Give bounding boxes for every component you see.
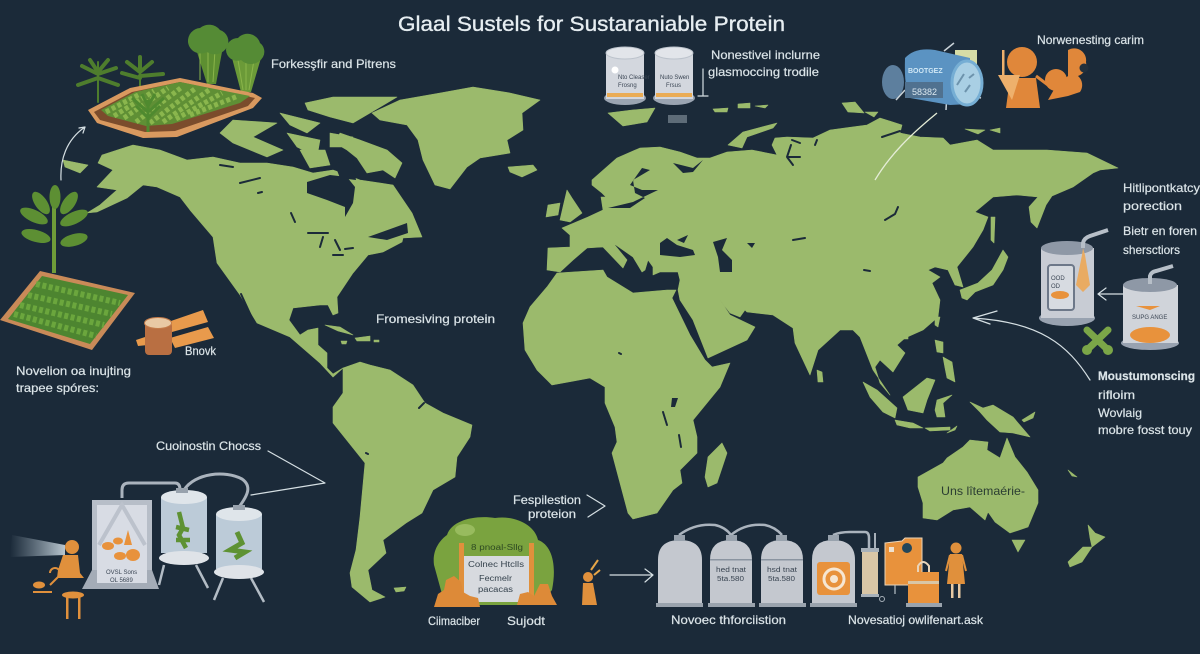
madagascar <box>705 443 727 487</box>
africa <box>523 270 730 519</box>
label: right upper notes: shersctiors <box>1123 243 1180 257</box>
canister one: Nto Cleaser <box>618 75 650 81</box>
inland seas and lakes <box>220 131 900 318</box>
japan and sakhalin <box>903 217 1008 339</box>
callout line: canisters <box>698 69 708 96</box>
icon: bushes <box>188 25 264 92</box>
label: canisters <box>708 48 820 79</box>
label: fespilestion <box>513 493 581 521</box>
label: left notes: trapee spóres: <box>16 381 99 395</box>
rocks <box>434 576 557 607</box>
label: australia: Uns lîtemaérie- <box>941 484 1025 498</box>
falkland islands <box>394 587 406 592</box>
illustration: blue capsule <box>882 43 982 110</box>
machine box: OL 5689 <box>110 578 133 584</box>
arrow: curved to asia <box>973 311 1090 380</box>
capsule end <box>952 61 982 105</box>
title: Glaal Sustels for Sustaraniable Protein <box>398 13 785 36</box>
label: tank row left: Novoec thforciistion <box>671 613 786 627</box>
pipes <box>122 483 180 498</box>
tank 3: 5ta.580 <box>768 576 795 583</box>
label: bioreactor: Cuoinostin Chocss <box>156 439 261 453</box>
iceland <box>508 165 537 177</box>
machine box: OVSL Sons <box>106 570 137 576</box>
light beam <box>10 535 65 557</box>
new zealand <box>1068 470 1105 567</box>
sign posts <box>459 543 464 603</box>
label: right lower notes: Wovlaig <box>1098 406 1142 420</box>
landmass: north america <box>87 145 422 377</box>
illustration: sign with bush: Colnec Htclls <box>468 560 524 569</box>
icon: seated person <box>33 540 84 592</box>
pipes <box>679 525 869 550</box>
canister two: Nuto Swen <box>660 75 689 81</box>
label: right upper notes: Hitlipontkatcy <box>1123 181 1200 195</box>
canister b: SUPG ANGE <box>1132 315 1167 321</box>
orange panel <box>885 538 922 594</box>
arrow: field to field <box>61 127 85 180</box>
crop rows <box>106 87 238 123</box>
illustration: sign with bush: 8 pnoal-Sllg <box>471 543 523 552</box>
callout chevron <box>587 495 605 517</box>
antenna <box>896 43 981 110</box>
label: right lower notes: rifloim <box>1098 388 1135 402</box>
label: right upper notes <box>1123 181 1200 257</box>
canister one <box>604 47 650 105</box>
label: canisters: Nonestivel inclurne <box>711 48 820 62</box>
capsule lobe <box>882 65 904 99</box>
tank 2: hed tnat <box>716 567 746 574</box>
tank 4 <box>810 535 857 607</box>
label: right lower notes <box>1098 369 1195 437</box>
canister a <box>1039 230 1108 326</box>
field plot <box>0 271 135 350</box>
canister a: OD <box>1051 284 1061 290</box>
label: forkes: Forkesşfir and Pitrens <box>271 57 396 71</box>
label: bnovk: Bnovk <box>185 344 217 358</box>
south american details <box>366 403 424 454</box>
label: sign captions: Sujodt <box>507 614 546 628</box>
label: left notes: Novelion oa inujting <box>16 364 131 378</box>
tank 2 <box>708 535 755 607</box>
african lakes <box>619 353 681 447</box>
arrow: worker to tanks <box>610 569 653 582</box>
icon: small worker <box>582 560 600 605</box>
canister one: Frosng <box>618 83 637 89</box>
svalbard <box>608 108 655 126</box>
southeast asia islands <box>863 340 957 433</box>
icon: palm trees <box>78 57 163 102</box>
illustration: sign with bush <box>434 517 557 607</box>
label: tank row right: Novesatioj owlifenart.ask <box>848 613 984 627</box>
world map <box>63 87 1118 602</box>
tank 3 <box>759 535 806 607</box>
grey tag <box>668 115 687 123</box>
illustration: bottom-left bioreactor <box>10 474 264 619</box>
new guinea <box>970 402 1035 437</box>
caribbean islands <box>325 325 379 344</box>
bush <box>434 517 554 605</box>
field plot <box>88 78 262 138</box>
canister two <box>653 47 695 105</box>
column <box>861 533 884 602</box>
tank 2: 5ta.580 <box>717 576 744 583</box>
tank 3: hsd tnat <box>767 567 797 574</box>
greenland <box>372 87 540 189</box>
arrow: capsule to asia <box>875 113 937 180</box>
label: canisters: glasmoccing trodile <box>708 65 819 79</box>
label: right upper notes: Bietr en foren <box>1123 224 1197 238</box>
tank two <box>214 505 264 602</box>
label: right lower notes: mobre fosst touy <box>1098 423 1192 437</box>
canister two: Frsus <box>666 83 681 89</box>
illustration: seedling and plot <box>0 185 135 350</box>
illustration: barrel and bars <box>136 310 214 355</box>
sign board <box>464 556 529 602</box>
illustration: blue capsule: 58382 <box>912 87 937 97</box>
tasmania <box>1012 540 1025 552</box>
label: fespilestion: Fespilestion <box>513 493 581 507</box>
icon: green cross <box>1082 330 1113 355</box>
illustration: tank row <box>656 525 966 607</box>
label: sign captions <box>428 614 546 628</box>
australia <box>918 438 1038 533</box>
capsule text: BOOTGEZ <box>908 68 943 75</box>
canadian arctic islands <box>63 97 402 178</box>
russian arctic islands <box>713 102 1000 148</box>
icon: stool <box>62 592 84 619</box>
british isles <box>546 190 582 222</box>
canister a: OOD <box>1051 276 1065 282</box>
icon: seedling <box>18 185 90 273</box>
tank one <box>159 488 209 588</box>
south america <box>333 362 472 602</box>
icon: barrel <box>145 322 172 355</box>
icon: orange bars <box>136 310 214 348</box>
illustration: top-centre canisters <box>604 47 695 105</box>
illustration: sign with bush: pacacas <box>478 585 513 594</box>
machine box <box>82 500 159 589</box>
label: map centre: Fromesiving protein <box>376 312 495 326</box>
label: norwenesting: Norwenesting carim <box>1037 33 1144 47</box>
label: left notes <box>16 364 131 395</box>
label: right lower notes: Moustumonscing <box>1098 369 1195 383</box>
icon: standing person <box>946 542 966 598</box>
orange bag <box>906 562 942 607</box>
illustration: right canisters <box>1039 230 1179 355</box>
illustration: orange figures <box>998 47 1088 108</box>
illustration: top-left crop field <box>78 25 264 138</box>
tank 1 <box>656 535 703 607</box>
eurasia <box>547 118 1118 395</box>
capsule body <box>905 49 970 105</box>
callout line: bioreactor <box>251 451 325 495</box>
arrow: canister b to a <box>1098 288 1123 300</box>
label: right upper notes: porection <box>1123 199 1182 213</box>
label: fespilestion: proteion <box>528 507 576 521</box>
illustration: sign with bush: Fecmelr <box>479 574 512 583</box>
sri lanka <box>817 370 823 382</box>
label: sign captions: Ciimaciber <box>428 614 480 628</box>
